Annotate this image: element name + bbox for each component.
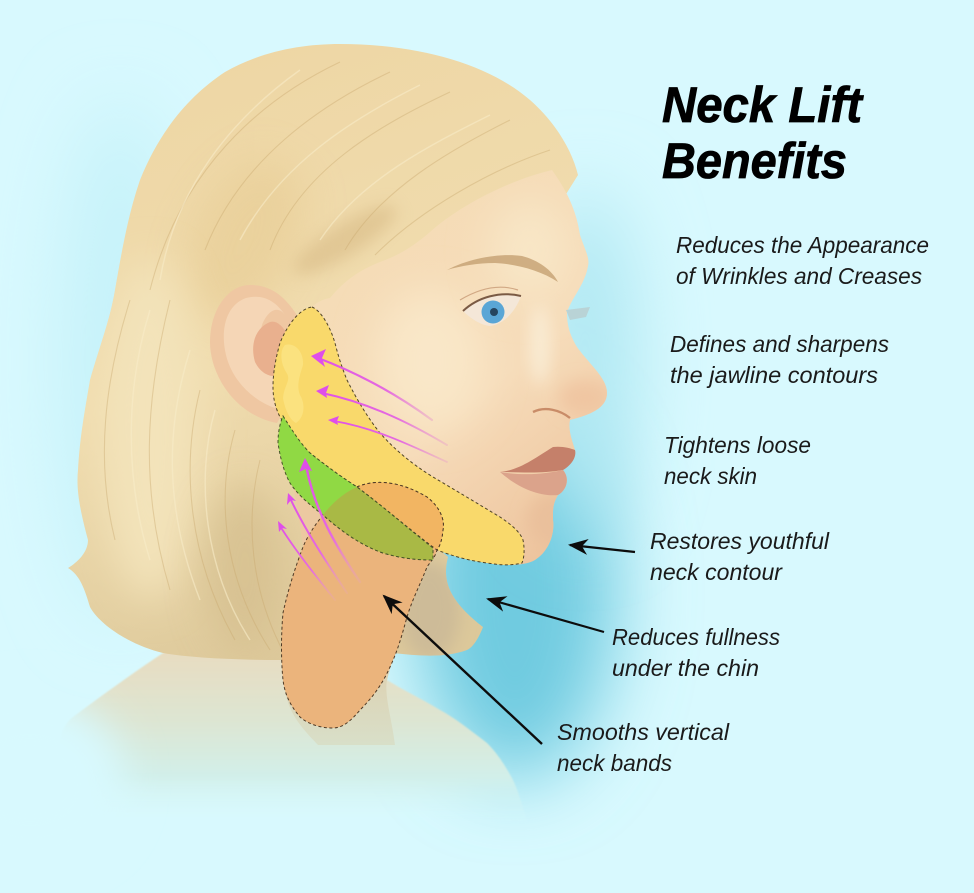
benefit: jawline bbox=[670, 331, 889, 388]
near eye bbox=[460, 287, 521, 326]
pink arrow 2 bbox=[316, 385, 447, 445]
arrow: to under chin bbox=[488, 599, 604, 632]
benefit: fullness: Reduces fullness bbox=[612, 624, 780, 650]
pink lift arrows bbox=[278, 349, 447, 600]
title bbox=[662, 77, 864, 189]
pink arrow 4 bbox=[299, 458, 360, 582]
pink arrow 3 bbox=[328, 416, 447, 462]
nostril and wing bbox=[533, 409, 570, 418]
title: Benefits bbox=[662, 133, 847, 189]
benefit: loose skin bbox=[664, 432, 811, 489]
hair silhouette bbox=[68, 44, 578, 660]
neck bbox=[282, 420, 437, 745]
benefit: neck bands: Smooths vertical bbox=[557, 719, 730, 745]
ear bbox=[210, 285, 300, 423]
hair mass bbox=[68, 44, 578, 660]
face bbox=[283, 170, 607, 565]
far eye lashes bbox=[566, 307, 590, 320]
benefit: neck contour: neck contour bbox=[650, 559, 783, 585]
hair tone and strands bbox=[100, 62, 550, 660]
benefit: loose skin: neck skin bbox=[664, 463, 757, 489]
fade of left shoulder bbox=[0, 695, 125, 865]
illustration: woman in profile bbox=[68, 44, 607, 801]
benefit: neck bands bbox=[557, 719, 730, 776]
lips bbox=[500, 447, 575, 495]
benefit: wrinkles: of Wrinkles and Creases bbox=[676, 263, 922, 289]
pink arrow 6 bbox=[278, 521, 335, 600]
overlay: yellow jaw and cheek zone bbox=[273, 307, 524, 565]
title: Neck Lift bbox=[662, 77, 864, 133]
arrow: to neck contour bbox=[570, 545, 635, 552]
face shading bbox=[375, 200, 611, 548]
benefit: loose skin: Tightens loose bbox=[664, 432, 811, 458]
benefit: fullness: under the chin bbox=[612, 655, 759, 681]
benefit: jawline: Defines and sharpens bbox=[670, 331, 889, 357]
pink arrow 5 bbox=[287, 493, 347, 593]
benefit: neck contour bbox=[650, 528, 830, 585]
benefit: neck contour: Restores youthful bbox=[650, 528, 830, 554]
overlay: upper orange overlap bbox=[357, 482, 443, 550]
overlay: green and orange overlap bbox=[323, 487, 434, 560]
benefit: fullness bbox=[612, 624, 780, 681]
ear tragus under overlay bbox=[281, 344, 303, 423]
shoulders and chest bbox=[57, 645, 527, 840]
benefit: neck bands: neck bands bbox=[557, 750, 672, 776]
benefit: wrinkles bbox=[676, 232, 929, 289]
benefit: jawline: the jawline contours bbox=[670, 362, 878, 388]
overlay: green lower zone bbox=[278, 416, 433, 560]
eyebrow bbox=[447, 255, 558, 282]
benefit: wrinkles: Reduces the Appearance bbox=[676, 232, 929, 258]
pink arrow 1 bbox=[311, 349, 432, 420]
arrow: to neck bands bbox=[384, 596, 542, 744]
overlay: neck zone bbox=[282, 482, 443, 728]
